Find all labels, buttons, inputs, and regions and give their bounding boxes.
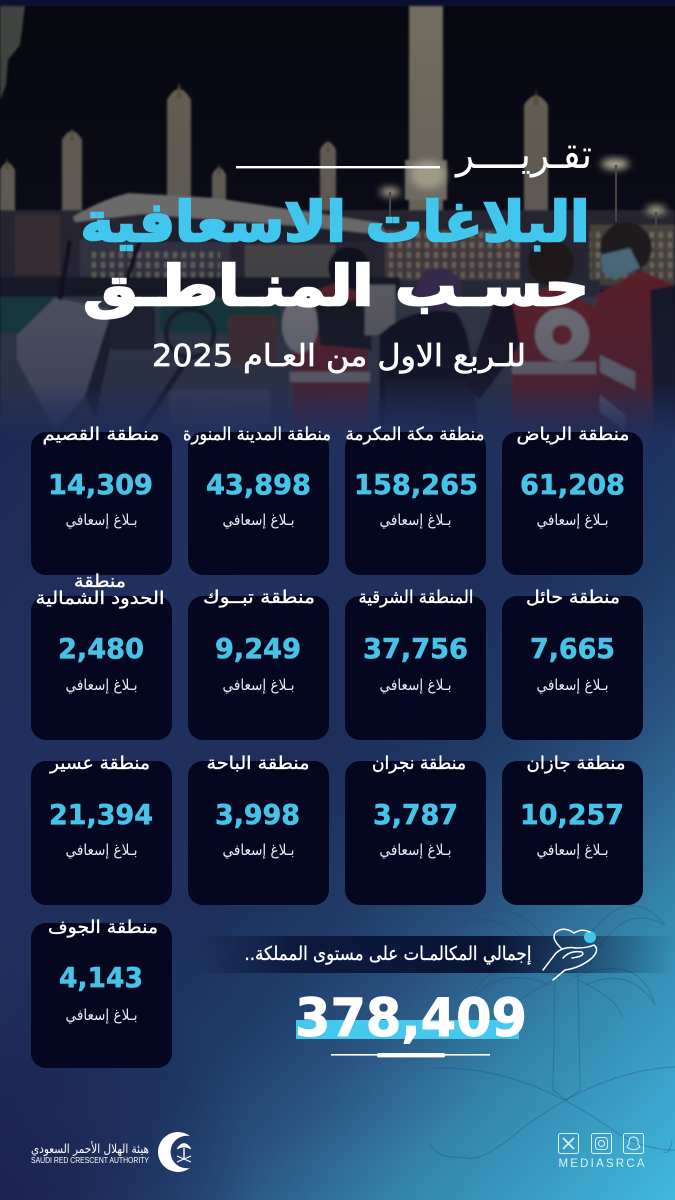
social icons bbox=[558, 1134, 644, 1154]
card: Northern Borders: منطقة bbox=[74, 571, 126, 592]
card: Riyadh: منطقة الرياض bbox=[516, 424, 630, 445]
card: Northern Borders: الحدود الشمالية bbox=[36, 588, 164, 609]
card: Madinah bbox=[183, 424, 331, 575]
card: Makkah bbox=[345, 424, 486, 575]
card: Madinah: بـلاغ إسعافي bbox=[222, 511, 294, 530]
kicker text: تقـريــــر bbox=[454, 132, 592, 178]
card: Qassim: بـلاغ إسعافي bbox=[66, 511, 138, 530]
banner text: إجمالي المكالمـات على مستوى المملكة.. bbox=[244, 943, 532, 966]
card: Tabuk bbox=[188, 587, 329, 740]
card: Najran bbox=[345, 753, 486, 905]
card: Al Jouf bbox=[31, 917, 172, 1068]
card: Eastern bbox=[345, 587, 486, 740]
card: Madinah: منطقة المدينة المنورة bbox=[183, 424, 331, 445]
card: Northern Borders bbox=[31, 571, 172, 740]
card: Hail bbox=[502, 587, 643, 740]
card: Al Jouf: 4,143 bbox=[59, 961, 143, 994]
card: Najran: 3,787 bbox=[373, 798, 458, 831]
card: Hail: 7,665 bbox=[530, 632, 615, 665]
card: Al Baha: منطقة الباحة bbox=[206, 753, 310, 774]
card: Hail: منطقة حائل bbox=[526, 587, 620, 608]
icon: Instagram bbox=[592, 1134, 612, 1154]
card: Jazan: 10,257 bbox=[520, 798, 624, 831]
card: Jazan: منطقة جازان bbox=[526, 753, 626, 774]
card: Makkah: بـلاغ إسعافي bbox=[380, 511, 452, 530]
card: Tabuk: منطقة تبــوك bbox=[203, 587, 315, 608]
card: Al Baha: 3,998 bbox=[215, 798, 300, 831]
card: Jazan: بـلاغ إسعافي bbox=[536, 841, 608, 860]
card: Eastern: بـلاغ إسعافي bbox=[380, 676, 452, 695]
photo: paramedics in front of mosque at night bbox=[0, 0, 675, 429]
logo Arabic name: هيئة الهلال الأحمر السعودي bbox=[31, 1141, 149, 1157]
card: Asir: منطقة عسير bbox=[49, 753, 150, 774]
card: Tabuk: 9,249 bbox=[215, 632, 301, 665]
total number: 378,409 bbox=[295, 988, 527, 1049]
card: Eastern: 37,756 bbox=[363, 632, 468, 665]
card: Makkah: 158,265 bbox=[354, 468, 478, 501]
card: Makkah: منطقة مكة المكرمة bbox=[346, 424, 484, 445]
card: Asir bbox=[31, 753, 172, 905]
card: Northern Borders: 2,480 bbox=[58, 632, 144, 665]
card: Najran: منطقة نجران bbox=[372, 753, 466, 774]
icon: Snapchat bbox=[624, 1134, 644, 1154]
card: Qassim: 14,309 bbox=[48, 468, 153, 501]
total value bbox=[295, 988, 527, 1049]
logo English name: SAUDI RED CRESCENT AUTHORITY bbox=[31, 1156, 150, 1165]
subtitle: للـربع الاول من العـام 2025 bbox=[152, 339, 526, 374]
emblem bbox=[177, 1144, 191, 1162]
card: Al Baha bbox=[188, 753, 329, 905]
watermark: palm and crossed swords bbox=[430, 906, 675, 1158]
icon: hand holding heart bbox=[543, 929, 597, 980]
card: Hail: بـلاغ إسعافي bbox=[536, 676, 608, 695]
total banner bbox=[190, 936, 675, 973]
card: Tabuk: بـلاغ إسعافي bbox=[222, 676, 294, 695]
card: Al Baha: بـلاغ إسعافي bbox=[222, 841, 294, 860]
card: Madinah: 43,898 bbox=[206, 468, 311, 501]
card: Riyadh: بـلاغ إسعافي bbox=[536, 511, 608, 530]
card: Najran: بـلاغ إسعافي bbox=[380, 841, 452, 860]
title line 2: حسـب المنـاطـق bbox=[83, 254, 589, 319]
title line 1: البلاغات الاسعافية bbox=[80, 190, 590, 254]
card: Eastern: المنطقة الشرقية bbox=[358, 587, 474, 608]
card: Riyadh: 61,208 bbox=[520, 468, 625, 501]
card: Jazan bbox=[502, 753, 643, 905]
total underline bbox=[331, 1053, 490, 1057]
card: Asir: 21,394 bbox=[49, 798, 153, 831]
icon: X bbox=[558, 1134, 578, 1154]
logo: Saudi Red Crescent Authority bbox=[31, 1132, 191, 1172]
card: Northern Borders: بـلاغ إسعافي bbox=[66, 676, 138, 695]
card: Riyadh bbox=[502, 424, 643, 575]
card: Al Jouf: بـلاغ إسعافي bbox=[66, 1006, 138, 1025]
card: Qassim bbox=[31, 424, 172, 575]
card: Al Jouf: منطقة الجوف bbox=[48, 917, 158, 938]
card: Asir: بـلاغ إسعافي bbox=[66, 841, 138, 860]
kicker line bbox=[236, 166, 440, 168]
card: Qassim: منطقة القصيم bbox=[42, 424, 160, 445]
crescent bbox=[158, 1132, 190, 1172]
social handle: MEDIASRCA bbox=[558, 1158, 645, 1170]
